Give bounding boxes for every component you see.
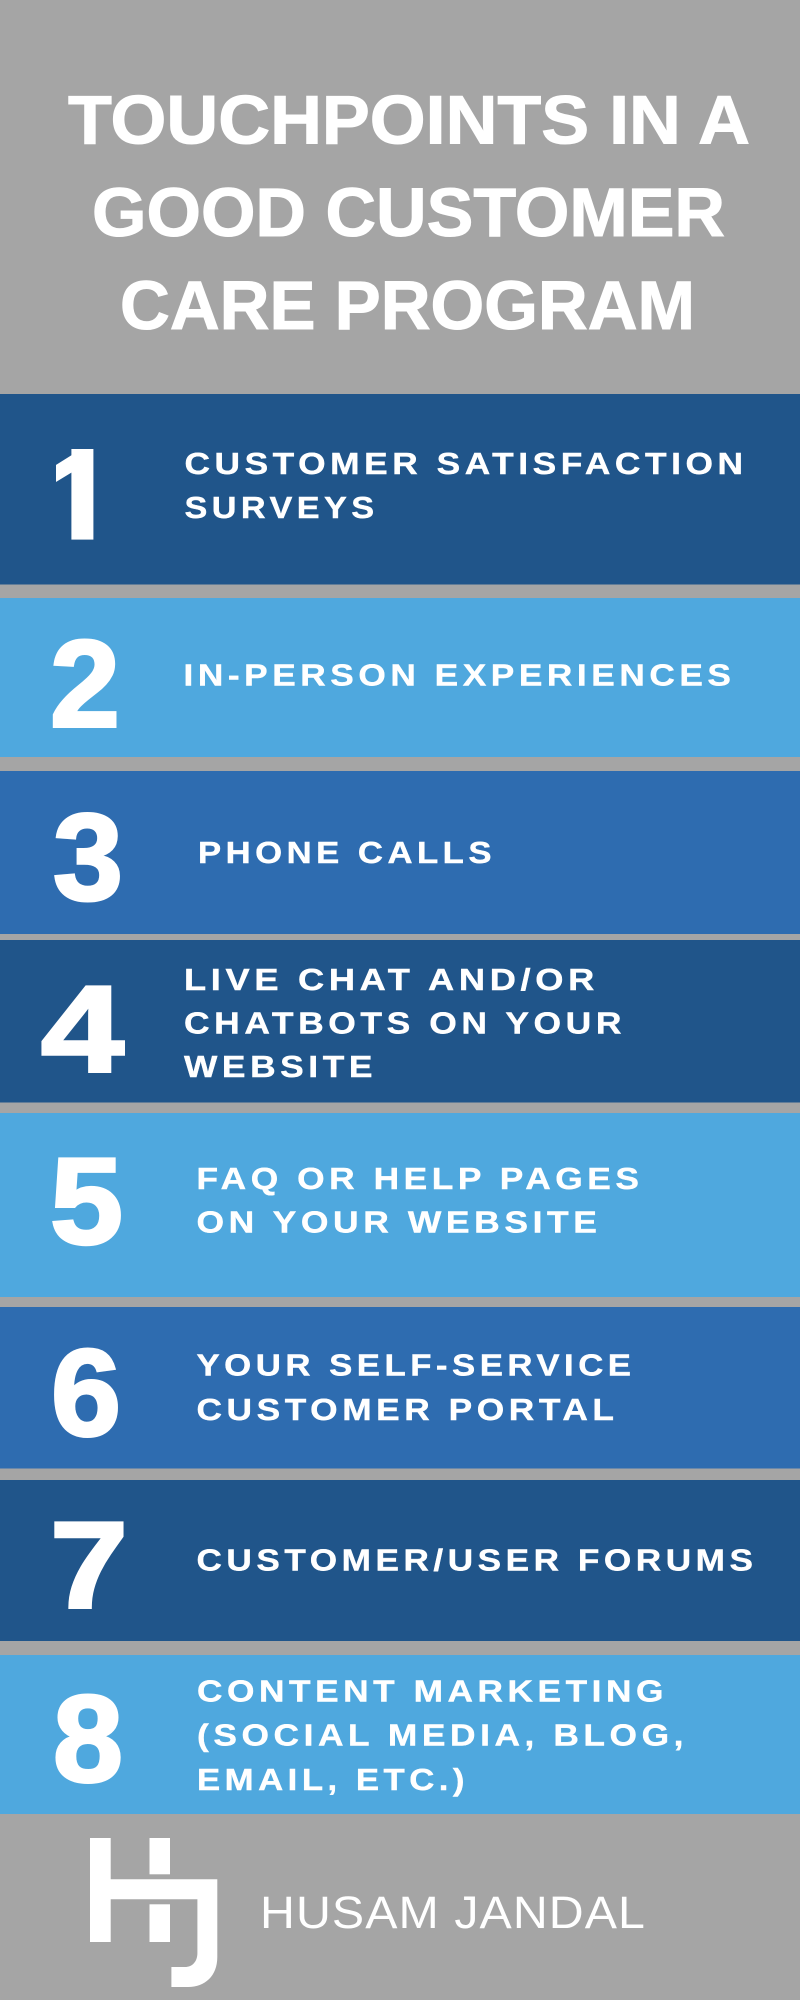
number 5: 5 [50,1134,123,1270]
panel: item 8 content marketing [0,1655,800,1814]
label 3: PHONE CALLS [198,835,496,870]
number 2: 2 [50,616,120,754]
number 6: 6 [51,1326,121,1462]
number 1: 1 [44,430,115,567]
label 1 [184,446,748,525]
number 7: 7 [50,1498,128,1634]
panel: item 4 live chat and chatbots [0,940,800,1102]
footer logo: HJ monogram and name [90,1838,646,1987]
title: TOUCHPOINTS IN A [68,82,750,158]
number 1 [56,449,94,540]
label 8: CONTENT MARKETING [197,1674,668,1708]
label 7: CUSTOMER/USER FORUMS [196,1542,758,1578]
number 4: 4 [41,962,124,1098]
panel: item 6 self-service customer portal [0,1307,800,1468]
label 8: (SOCIAL MEDIA, BLOG, [197,1718,688,1752]
label 1: SURVEYS [184,490,378,525]
label 4: WEBSITE [184,1049,377,1084]
label 2: IN-PERSON EXPERIENCES [184,658,736,692]
title [68,82,750,344]
label 5: ON YOUR WEBSITE [196,1204,602,1240]
label 4: LIVE CHAT AND/OR [184,962,599,997]
panel: item 2 in-person experiences [0,598,800,757]
label 8: EMAIL, ETC.) [197,1762,469,1797]
brand name: HUSAM JANDAL [260,1887,646,1938]
label 4: CHATBOTS ON YOUR [184,1006,626,1040]
panel: item 7 customer/user forums [0,1480,800,1641]
title: CARE PROGRAM [120,267,695,344]
panel: item 5 faq or help pages [0,1113,800,1297]
label 6: YOUR SELF-SERVICE [196,1348,636,1382]
icon: HJ monogram [90,1838,217,1987]
panel: item 1 customer satisfaction surveys [0,394,800,584]
number 8: 8 [53,1672,123,1808]
label 5: FAQ OR HELP PAGES [196,1161,644,1196]
panel: item 3 phone calls [0,771,800,934]
label 4 [184,962,626,1084]
label 6 [196,1348,636,1427]
title: GOOD CUSTOMER [92,174,725,251]
label 1: CUSTOMER SATISFACTION [184,446,748,481]
label 5 [196,1161,644,1240]
label 8 [197,1674,688,1797]
label 6: CUSTOMER PORTAL [196,1392,618,1427]
number 3: 3 [53,790,123,926]
